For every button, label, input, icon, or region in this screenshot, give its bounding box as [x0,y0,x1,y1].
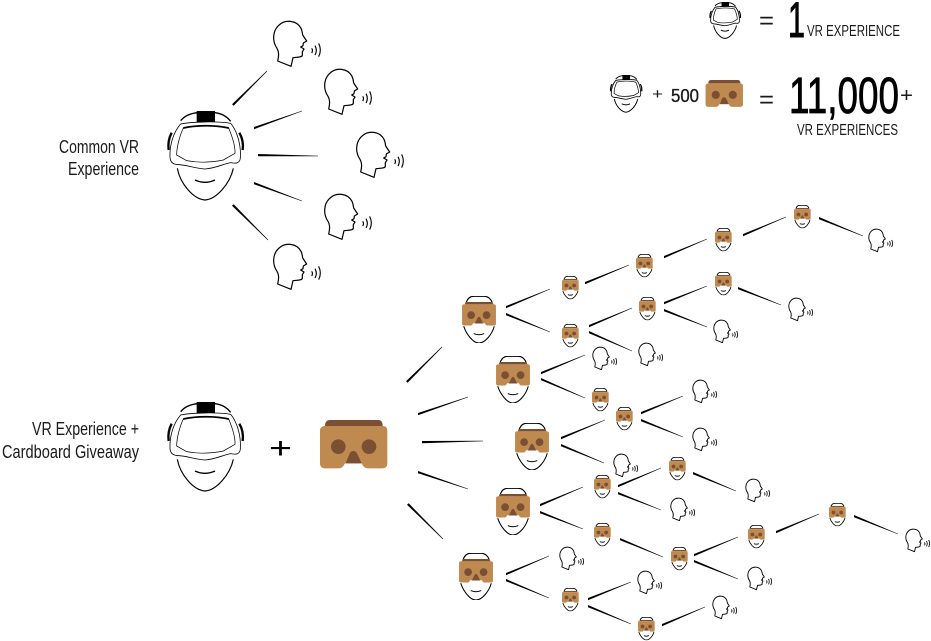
heading: VR experience plus cardboard giveaway label: VR Experience + [32,419,139,439]
arrows: sharing tree connections [506,217,898,626]
icon: cardboard wearer, first tier 4 [496,488,530,535]
icon: speaking viewer 4 [325,194,371,239]
heading: VR experience plus cardboard giveaway label [2,419,139,462]
icons: small cardboard wearers in the sharing tree [562,205,846,640]
icon: speaking viewer 2 [325,69,371,114]
icon: large cardboard viewer [320,420,387,468]
icon: cardboard wearer, first tier 1 [462,296,496,343]
heading: VR experience plus cardboard giveaway label: Cardboard Giveaway [2,442,139,462]
icon: small cardboard viewer [706,80,743,107]
heading: common VR experience label [59,137,139,179]
legend: headset plus 500 cardboards equals 11,000+ experiences [611,67,913,139]
icon: cardboard wearer, first tier 3 [515,423,549,470]
icon: cardboard wearer, first tier 5 [459,553,493,600]
icon: large VR headset wearer [168,111,243,200]
plus superscript: + [900,85,913,107]
heading: common VR experience label: Experience [68,159,139,179]
heading: common VR experience label: Common VR [59,137,139,157]
equals sign: = [759,86,774,114]
legend: one headset equals one VR experience [710,0,900,48]
icon: cardboard wearer, first tier 2 [496,356,530,403]
equals sign: = [759,8,774,34]
icon: speaking viewer 5 [274,244,320,289]
arrows: cardboard viewer to five recipients [406,347,483,539]
plus sign: + [652,86,663,103]
icon: small headset wearer [611,75,642,112]
icon: speaking viewer 3 [357,132,403,177]
number: 500: 500 [671,86,699,106]
arrows: headset to five viewers [232,71,318,240]
icon: small headset wearer [710,2,740,38]
icon: speaking viewer 1 [274,21,320,66]
plus sign: + [269,432,292,465]
icons: small speaking viewers in the sharing tree [560,229,930,619]
icon: large headset wearer [168,402,243,491]
